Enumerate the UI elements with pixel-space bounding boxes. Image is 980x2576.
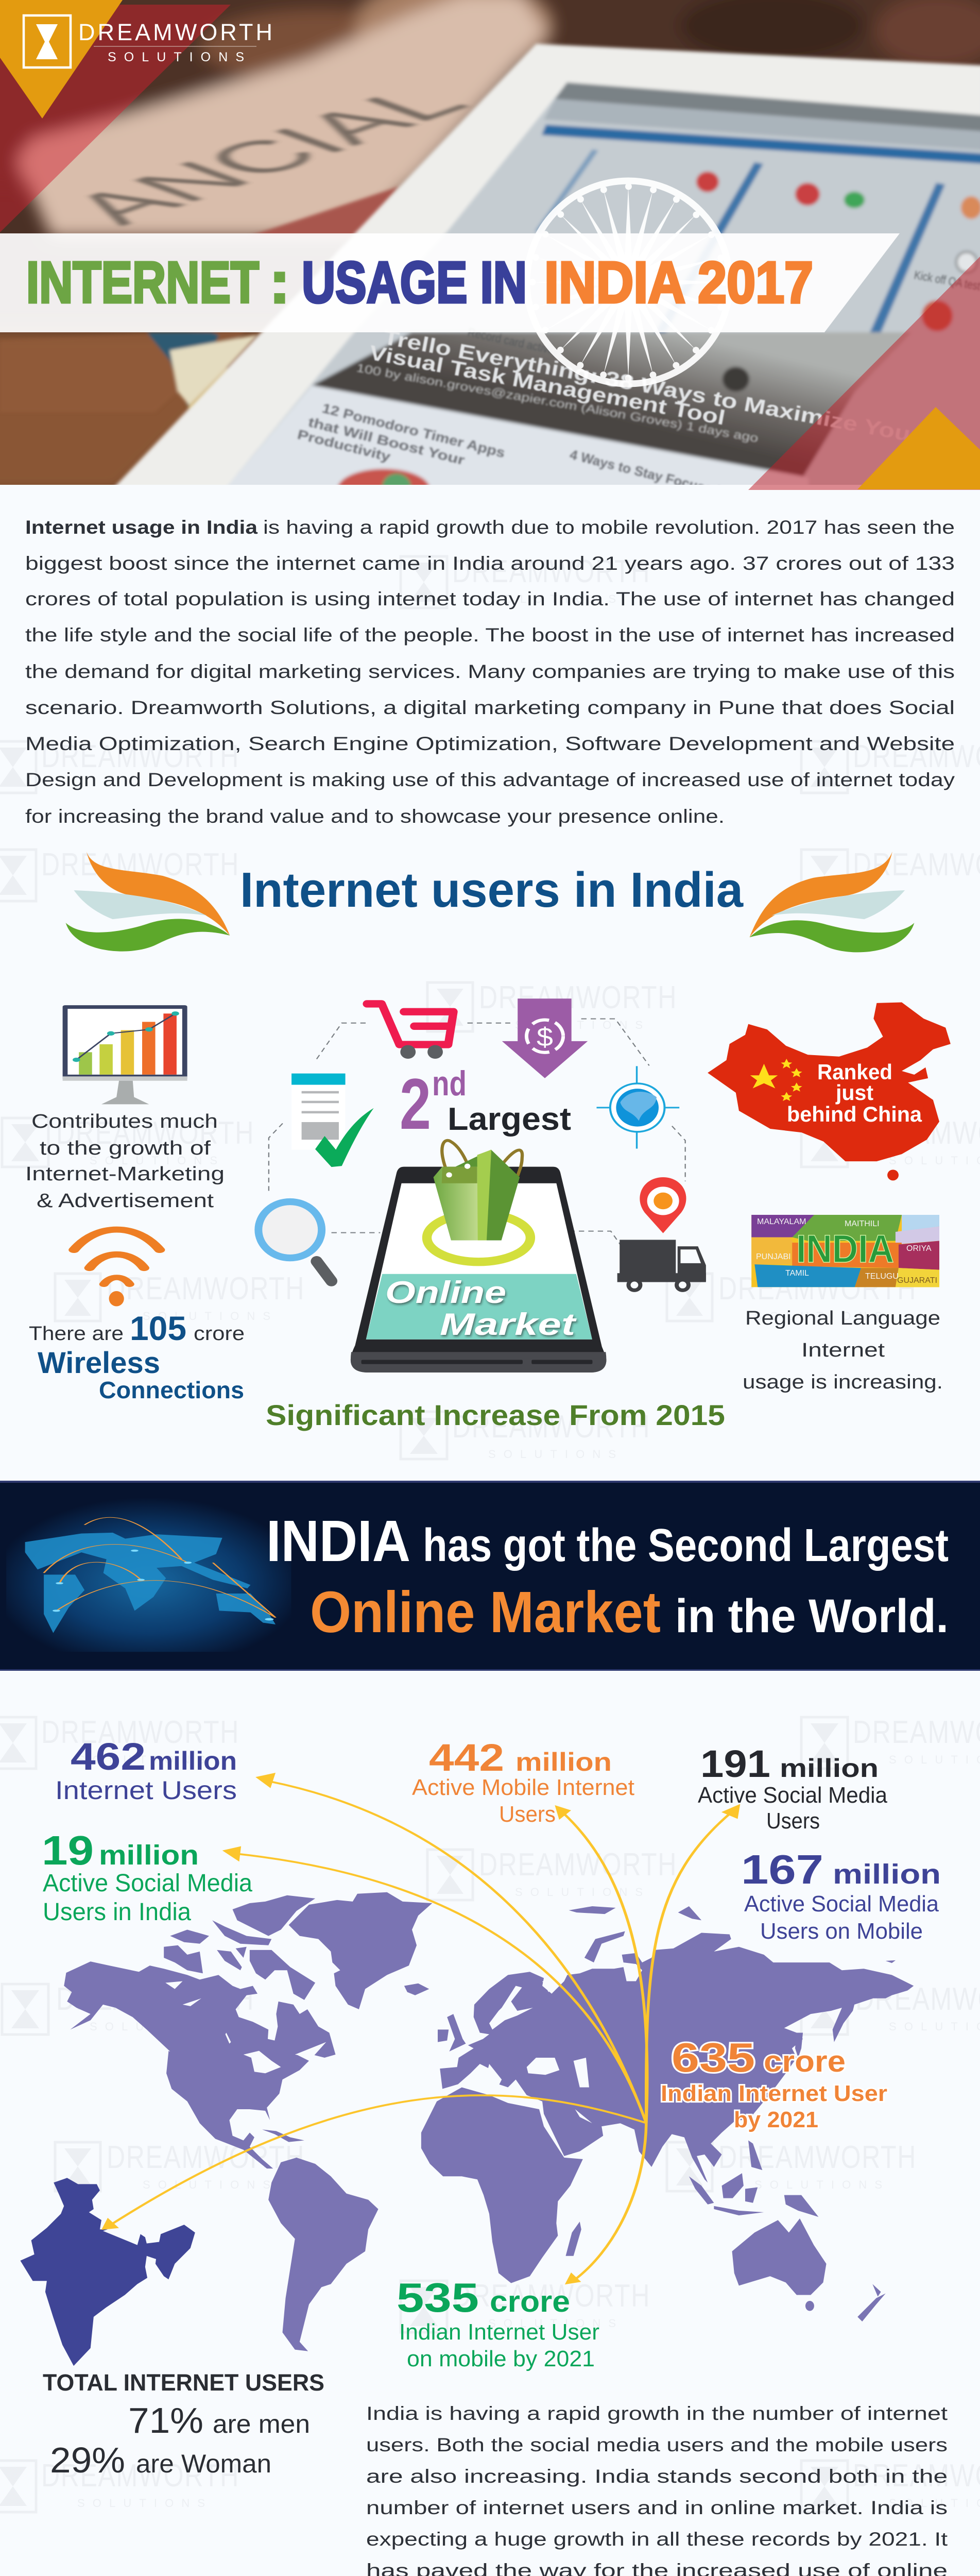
stat: 442 million active mobile internet users: Users <box>499 1802 556 1827</box>
text: DREAMWORTH <box>718 1271 917 1307</box>
intro text block: for increasing the brand value and to showcase your presence online. <box>25 806 725 827</box>
stat: 191 million active social media users <box>698 1742 888 1834</box>
text: 105 crore wireless connections: crore <box>194 1323 245 1345</box>
text: banner line two <box>310 1580 949 1645</box>
hero photo: blurred book and tablet: that Will Boost Your <box>307 414 467 468</box>
corner triangles top left <box>0 0 231 232</box>
text: DREAMWORTH <box>41 739 239 774</box>
stat: total internet users: are Woman <box>136 2449 271 2478</box>
text: SOLUTIONS <box>515 1019 644 1031</box>
hero photo: blurred book and tablet: 4 Ways to Stay Focused <box>569 447 722 499</box>
icon: purple price arrow: $ <box>537 1022 553 1052</box>
text: contributes much <box>25 1111 225 1212</box>
icon: glowing world map <box>6 1498 291 1652</box>
text: SOLUTIONS <box>90 1154 218 1167</box>
hero photo: blurred book and tablet: Productivity <box>296 427 392 465</box>
stat: 167 million active social media users on mobile: Active Social Media <box>744 1891 939 1917</box>
panel: online market illustration <box>259 998 706 1372</box>
stat: total internet users <box>43 2369 324 2480</box>
title <box>26 250 813 315</box>
text: DREAMWORTH <box>41 2458 239 2494</box>
text block: growth paragraph: are also increasing. India stands second both in the <box>366 2466 948 2487</box>
text: SOLUTIONS <box>90 2020 218 2033</box>
text: contributes much: Internet-Marketing <box>25 1163 225 1185</box>
stat: 462 million internet users: Internet Users <box>55 1776 237 1805</box>
text: SOLUTIONS <box>488 1448 617 1461</box>
stat: 19 million active social media users in India: 19 <box>42 1827 94 1873</box>
text: regional language: Internet <box>801 1340 885 1361</box>
text: DREAMWORTH <box>452 554 650 589</box>
stat: 462 million internet users <box>55 1735 237 1805</box>
stat: 635 crore Indian internet user by 2021: crore <box>764 2045 846 2078</box>
stat: total internet users: 29% <box>50 2440 125 2480</box>
world map: eurasia, africa and oceania <box>421 1906 914 2321</box>
text: DREAMWORTH <box>41 847 239 883</box>
text: ranked just behind China: behind China <box>787 1102 922 1126</box>
icon: shopping cart <box>367 1004 454 1059</box>
icon: wifi signal <box>74 1230 160 1306</box>
icon: India languages map: GUJARATI <box>897 1276 937 1285</box>
corner triangles bottom right <box>748 257 980 490</box>
text: SOLUTIONS <box>77 1753 206 1766</box>
text: DREAMWORTH <box>107 2140 305 2175</box>
text: 105 crore wireless connections: Connections <box>99 1377 244 1403</box>
stat: 442 million active mobile internet users: Active Mobile Internet <box>412 1775 634 1800</box>
icon: shopping bag <box>434 1141 522 1240</box>
text: online market: Market <box>440 1307 577 1342</box>
text: DREAMWORTH <box>718 2140 917 2175</box>
icon: India languages map: TELUGU <box>865 1272 899 1281</box>
text: banner line one <box>266 1509 949 1573</box>
stat: 191 million active social media users: million <box>780 1754 879 1783</box>
stat: 19 million active social media users in India: million <box>99 1840 199 1871</box>
intro text block: Design and Development is making use of this advantage of increased use of internet today <box>25 769 955 790</box>
stat: 535 crore Indian internet user on mobile by 2021: 535 <box>397 2275 479 2320</box>
text: 2nd Largest: Largest <box>448 1101 571 1137</box>
text: DREAMWORTH <box>479 980 677 1015</box>
icon: smartphone <box>351 1167 606 1372</box>
chart: world map with arrows <box>20 1735 941 2371</box>
text: banner line two: in the World. <box>675 1590 949 1642</box>
title: INDIA 2017 <box>544 250 813 315</box>
icon: China map <box>708 1003 951 1180</box>
text block: growth paragraph: expecting a huge growth in all these records by 2021. It <box>366 2529 948 2550</box>
stat: 635 crore Indian internet user by 2021: 635 <box>672 2035 755 2080</box>
text: regional language <box>743 1308 943 1393</box>
text: regional language: usage is increasing. <box>743 1371 943 1393</box>
stat: 635 crore Indian internet user by 2021: Indian Internet User <box>661 2081 887 2106</box>
text: banner line one: INDIA <box>266 1509 410 1573</box>
icon: document with check <box>291 1074 374 1167</box>
title band <box>0 233 900 332</box>
intro text block: Internet usage in India <box>25 517 257 538</box>
icon: purple price arrow <box>502 998 588 1078</box>
hero photo: blurred book and tablet: 12 Pomodoro Timer Apps <box>321 400 507 461</box>
text: ranked just behind China <box>787 1060 922 1126</box>
hero photo: blurred book and tablet <box>0 0 980 499</box>
panel: hero header <box>0 0 980 510</box>
stat: 635 crore Indian internet user by 2021: by 2021 <box>734 2107 818 2132</box>
icon: monitor with growth chart <box>63 1005 187 1104</box>
text block: growth paragraph: users. Both the social media users and the mobile users <box>366 2434 948 2455</box>
hero photo: blurred book and tablet: Record card activity <box>467 325 560 358</box>
dashed connectors <box>269 1019 685 1260</box>
text: DREAMWORTH <box>56 1981 254 2017</box>
text: SOLUTIONS <box>488 2317 617 2330</box>
stat: 191 million active social media users: 191 <box>700 1742 770 1785</box>
text: 2nd Largest <box>400 1063 571 1144</box>
hero photo: blurred book and tablet: Trello Everything: 38 Ways to Maximize Your <box>381 326 922 448</box>
text: 105 crore wireless connections: There are <box>29 1323 124 1345</box>
text: online market: Online <box>385 1275 506 1310</box>
text: 2nd Largest: 2 <box>400 1063 431 1144</box>
icon: location pin <box>640 1177 686 1233</box>
hero photo: blurred book and tablet: ANCIAL <box>44 78 490 233</box>
stat: 191 million active social media users: Users <box>766 1808 820 1834</box>
intro text block: crores of total population is using internet today in India. The use of internet has changed <box>25 588 955 609</box>
stat: 167 million active social media users on mobile: Users on Mobile <box>760 1919 923 1944</box>
text: SOLUTIONS <box>754 1310 883 1323</box>
text: contributes much: to the growth of <box>40 1138 211 1159</box>
title: USAGE IN <box>302 250 527 315</box>
text: SOLUTIONS <box>143 2178 271 2191</box>
icon: India languages map <box>751 1215 939 1287</box>
text: DREAMWORTH <box>452 2278 650 2314</box>
stat: 19 million active social media users in India: Active Social Media <box>43 1870 252 1897</box>
text: DREAMWORTH <box>41 1715 239 1750</box>
stat: 535 crore Indian internet user on mobile by 2021: on mobile by 2021 <box>407 2346 595 2371</box>
icon: magnifying glass <box>259 1201 332 1281</box>
text: 105 crore wireless connections: Wireless <box>38 1346 160 1380</box>
icon: India languages map: MAITHILI <box>845 1219 880 1228</box>
icon: India languages map: MALAYALAM <box>757 1217 806 1226</box>
text: DREAMWORTH <box>452 1409 650 1445</box>
text: ranked just behind China: Ranked <box>817 1060 892 1084</box>
intro text block: Media Optimization, Search Engine Optimization, Software Development and Website <box>25 733 955 754</box>
arrows <box>101 1773 740 2284</box>
intro text block: the life style and the social life of the people. The boost in the use of internet has increased <box>25 624 955 646</box>
text: banner line two: Online Market <box>310 1580 661 1645</box>
India map <box>20 2178 195 2366</box>
text: significant increase: Significant Increase From 2015 <box>266 1399 725 1431</box>
intro text block: biggest boost since the internet came in India around 21 years ago. 37 crores out of 133 <box>25 553 955 574</box>
stat: 462 million internet users: 462 <box>71 1735 146 1778</box>
stat: total internet users: TOTAL INTERNET USERS <box>43 2369 324 2396</box>
icon: tricolour swoosh left <box>66 852 230 952</box>
intro text block: scenario. Dreamworth Solutions, a digital marketing company in Pune that does Social <box>25 697 955 718</box>
stat: 167 million active social media users on mobile: million <box>833 1859 941 1890</box>
stat: 462 million internet users: million <box>149 1747 237 1775</box>
text: DREAMWORTH <box>107 1271 305 1307</box>
text: online market <box>385 1275 577 1342</box>
text: ranked just behind China: just <box>835 1080 873 1105</box>
text: SOLUTIONS <box>488 592 617 605</box>
stat: 635 crore Indian internet user by 2021 <box>661 2035 887 2132</box>
title: INTERNET <box>26 250 259 315</box>
stat: 442 million active mobile internet users: million <box>515 1748 612 1776</box>
panel: dark banner <box>0 1481 980 1671</box>
stat: 19 million active social media users in India: Users in India <box>43 1899 191 1926</box>
text: 105 crore wireless connections: 105 <box>130 1309 186 1347</box>
text: contributes much: & Advertisement <box>37 1190 214 1212</box>
icon: tricolour swoosh right <box>750 852 914 952</box>
text: DREAMWORTH <box>56 1115 254 1151</box>
text: SOLUTIONS <box>143 1310 271 1323</box>
text: 105 crore wireless connections <box>29 1309 245 1403</box>
stat: 442 million active mobile internet users <box>412 1736 634 1827</box>
icon: globe target <box>596 1066 679 1148</box>
icon: delivery truck <box>617 1240 706 1292</box>
text block: growth paragraph <box>366 2403 948 2576</box>
title: : <box>270 250 289 315</box>
icon: India languages map: INDIA <box>796 1227 894 1271</box>
stat: total internet users: 71% <box>128 2400 203 2441</box>
stat: 535 crore Indian internet user on mobile by 2021: Indian Internet User <box>399 2319 599 2345</box>
logo: Dreamworth header: SOLUTIONS <box>108 50 244 64</box>
icon: ashoka chakra wheel <box>527 181 730 384</box>
text: SOLUTIONS <box>754 2178 883 2191</box>
icon: India languages map: TAMIL <box>785 1269 809 1278</box>
intro text block <box>25 517 955 827</box>
heading: Internet users in India: Internet users in India <box>240 862 744 918</box>
stat: 535 crore Indian internet user on mobile by 2021: crore <box>490 2285 570 2318</box>
stat: 191 million active social media users: Active Social Media <box>698 1783 888 1808</box>
stat: 19 million active social media users in India <box>42 1827 252 1926</box>
stat: 167 million active social media users on mobile <box>741 1846 941 1944</box>
logo: Dreamworth header: DREAMWORTH <box>78 19 272 45</box>
intro text block: is having a rapid growth due to mobile revolution. 2017 has seen the <box>263 517 955 538</box>
stat: 167 million active social media users on mobile: 167 <box>741 1846 823 1892</box>
hero photo: blurred book and tablet: Visual Task Management Tool <box>367 342 727 430</box>
text: contributes much: Contributes much <box>31 1111 218 1132</box>
stat: 535 crore Indian internet user on mobile by 2021 <box>397 2275 599 2371</box>
icon: India languages map: ORIYA <box>906 1244 932 1253</box>
logo: Dreamworth header <box>24 15 272 67</box>
text: DREAMWORTH <box>479 1847 677 1883</box>
text: SOLUTIONS <box>77 2497 206 2510</box>
text block: growth paragraph: number of internet users and in online market. India is <box>366 2497 948 2518</box>
intro text block: the demand for digital marketing services. Many companies are trying to make use of this <box>25 661 955 682</box>
text: SOLUTIONS <box>515 1886 644 1899</box>
stat: total internet users: are men <box>213 2410 310 2438</box>
icon: India languages map: PUNJABI <box>756 1252 791 1261</box>
hero photo: blurred book and tablet: 100 by alison.groves@zapier.com (Alison Groves) 1 days ago <box>355 361 760 445</box>
text block: growth paragraph: India is having a rapid growth in the number of internet <box>366 2403 948 2424</box>
world map: americas and greenland <box>64 1892 432 2351</box>
stat: 442 million active mobile internet users: 442 <box>429 1736 504 1779</box>
text: regional language: Regional Language <box>745 1308 940 1329</box>
text: 2nd Largest: nd <box>432 1064 467 1103</box>
